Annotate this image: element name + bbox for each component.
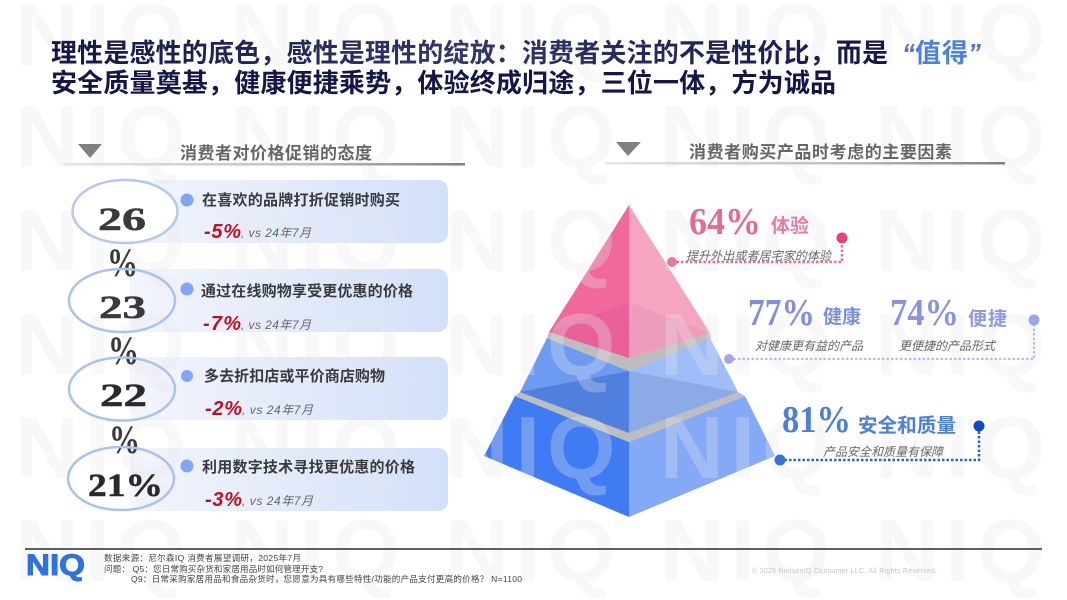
callout: 81% safety and quality: 安全和质量 bbox=[858, 414, 956, 437]
background NIQ watermark: NIQ bbox=[660, 501, 837, 600]
callout: 81% safety and quality: 81% bbox=[782, 399, 851, 441]
row 2: 23%: -7% bbox=[203, 313, 241, 335]
callout: 77% health and 74% convenience bbox=[724, 292, 1040, 364]
callout: 77% health and 74% convenience: 77% bbox=[748, 292, 815, 334]
row 1: 26%: 26 bbox=[98, 202, 146, 238]
callout: 77% health and 74% convenience: 74% bbox=[890, 292, 959, 334]
heading: right bbox=[605, 142, 1005, 164]
row 1: 26%: -5% bbox=[204, 221, 241, 243]
row 4: 21%: 21% bbox=[88, 468, 163, 504]
card 2 bbox=[130, 269, 448, 332]
background NIQ watermark: NIQ bbox=[445, 501, 622, 600]
background NIQ watermark: NIQ bbox=[230, 295, 407, 394]
callout: 81% safety and quality bbox=[774, 399, 984, 466]
title: 值得 bbox=[915, 38, 968, 68]
row 2: 23% bbox=[69, 269, 413, 373]
row 1: 26%: , vs 24年7月 bbox=[241, 226, 312, 240]
background NIQ watermark: NIQ bbox=[230, 191, 407, 290]
row 2: 23%: 23 bbox=[99, 290, 146, 326]
callout: 64% experience bbox=[667, 201, 848, 267]
row 4: 21%: -3% bbox=[205, 489, 242, 511]
title bbox=[51, 38, 981, 98]
background NIQ watermark: NIQ bbox=[15, 191, 192, 290]
background NIQ watermark: NIQ bbox=[660, 191, 837, 290]
heading: left bbox=[63, 143, 465, 166]
title: 安全质量奠基，健康便捷乘势，体验终成归途，三位一体，方为诚品 bbox=[51, 68, 836, 98]
callout: 64% experience: 64% bbox=[689, 201, 761, 243]
background NIQ watermark: NIQ bbox=[875, 295, 1052, 394]
callout: 77% health and 74% convenience: 更便捷的产品形式 bbox=[899, 339, 997, 353]
footnote bbox=[104, 553, 522, 584]
panel: left cards bbox=[130, 180, 448, 511]
footer rule bbox=[25, 548, 1042, 550]
background NIQ watermark: NIQ bbox=[660, 295, 837, 394]
NIQ logo: NIQ bbox=[26, 549, 85, 582]
footnote: 数据来源：尼尔森IQ 消费者展望调研，2025年7月 bbox=[104, 553, 301, 563]
footnote: Q9：日常采购家居用品和食品杂货时，您愿意为具有哪些特性/功能的产品支付更高的价格？ N=1100 bbox=[131, 574, 522, 584]
copyright: © 2025 NielsenIQ Consumer LLC. All Rights Reserved. bbox=[752, 567, 937, 575]
background NIQ watermark: NIQ bbox=[875, 501, 1052, 600]
row 1: 26%: 在喜欢的品牌打折促销时购买 bbox=[202, 191, 400, 209]
card 4 bbox=[130, 448, 448, 511]
background NIQ watermark: NIQ bbox=[15, 501, 192, 600]
background NIQ watermark: NIQ bbox=[660, 398, 837, 497]
card 3 bbox=[130, 357, 448, 420]
background NIQ watermark: NIQ bbox=[660, 87, 837, 186]
background NIQ watermark: NIQ bbox=[875, 191, 1052, 290]
background NIQ watermark: NIQ bbox=[875, 398, 1052, 497]
pyramid: bottom layer safety and quality bbox=[484, 392, 775, 517]
footnote: 问题： Q5：您日常购买杂货和家居用品时如何管理开支? bbox=[104, 564, 323, 574]
callout: 77% health and 74% convenience: 健康 bbox=[823, 305, 861, 328]
background NIQ watermark: NIQ bbox=[15, 398, 192, 497]
row 3: 22%: % bbox=[109, 417, 140, 462]
callout: 77% health and 74% convenience: 对健康更有益的产品 bbox=[755, 339, 864, 353]
row 3: 22%: 多去折扣店或平价商店购物 bbox=[204, 367, 385, 385]
title: “ bbox=[902, 38, 915, 68]
background NIQ watermark: NIQ bbox=[15, 295, 192, 394]
pyramid: middle layer health and convenience bbox=[520, 332, 738, 433]
pyramid: top layer experience bbox=[549, 205, 710, 358]
background NIQ watermark: NIQ bbox=[15, 87, 192, 186]
callout: 64% experience: 体验 bbox=[771, 214, 809, 237]
row 3: 22%: -2% bbox=[205, 398, 242, 420]
row 3: 22%: 22 bbox=[100, 378, 147, 414]
row 1: 26% bbox=[72, 180, 400, 285]
callout: 64% experience: 提升外出或者居宅家的体验 bbox=[686, 249, 833, 263]
callout: 81% safety and quality: 产品安全和质量有保障 bbox=[823, 445, 945, 459]
row 3: 22% bbox=[69, 358, 385, 462]
background NIQ watermark: NIQ bbox=[445, 87, 622, 186]
title: 理性是感性的底色，感性是理性的绽放：消费者关注的不是性价比，而是 bbox=[51, 38, 888, 68]
heading: left: 消费者对价格促销的态度 bbox=[180, 143, 372, 163]
row 3: 22%: , vs 24年7月 bbox=[242, 403, 314, 417]
pyramid bbox=[484, 205, 775, 517]
row 4: 21%: , vs 24年7月 bbox=[242, 494, 314, 508]
row 2: 23%: , vs 24年7月 bbox=[241, 318, 312, 332]
background NIQ watermark: NIQ bbox=[445, 191, 622, 290]
callout: 77% health and 74% convenience: 便捷 bbox=[968, 308, 1007, 330]
background NIQ watermark: NIQ bbox=[230, 398, 407, 497]
card 1 bbox=[130, 180, 448, 243]
row 4: 21%: 利用数字技术寻找更优惠的价格 bbox=[202, 458, 415, 476]
background NIQ watermark: NIQ bbox=[230, 87, 407, 186]
title: ” bbox=[968, 38, 981, 68]
row 1: 26%: % bbox=[107, 240, 138, 285]
background NIQ watermark: NIQ bbox=[445, 295, 622, 394]
row 4: 21% bbox=[68, 447, 415, 511]
background NIQ watermark: NIQ bbox=[875, 87, 1052, 186]
background NIQ watermark: NIQ bbox=[230, 501, 407, 600]
row 2: 23%: % bbox=[108, 328, 139, 373]
heading: right: 消费者购买产品时考虑的主要因素 bbox=[689, 143, 952, 162]
background NIQ watermark: NIQ bbox=[445, 398, 622, 497]
row 2: 23%: 通过在线购物享受更优惠的价格 bbox=[201, 282, 413, 300]
